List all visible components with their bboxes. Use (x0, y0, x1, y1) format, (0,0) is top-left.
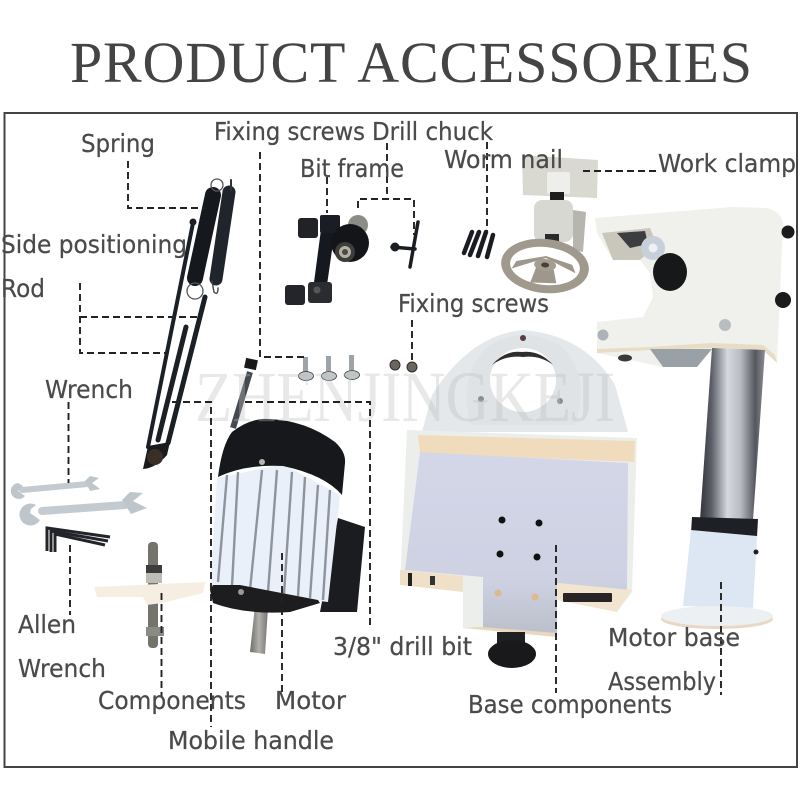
label: drill chuck: Drill chuck (372, 117, 494, 146)
label: motor: Motor (275, 686, 347, 715)
steel column (700, 348, 765, 520)
capacitor box (320, 518, 365, 612)
title: PRODUCT ACCESSORIES (70, 30, 752, 95)
arched motor mount (422, 330, 628, 432)
small fixing screws (298, 355, 417, 380)
base components (400, 330, 637, 668)
chuck key (391, 222, 418, 267)
end plate (210, 585, 320, 613)
spring and side positioning rods (143, 179, 231, 469)
label: worm nail: Worm nail (444, 145, 563, 174)
sleeve (683, 530, 757, 608)
label: allen: Allen (18, 610, 76, 639)
label: fixing screws lower: Fixing screws (398, 289, 549, 318)
finned body (210, 464, 340, 602)
watermark: ZHENJINGKEJI (195, 357, 615, 437)
shaft (250, 606, 268, 654)
hand wheel (498, 235, 592, 297)
label: drill bit: 3/8" drill bit (333, 632, 472, 661)
label: mobile handle: Mobile handle (168, 726, 334, 755)
black collar (691, 517, 758, 537)
head casting (595, 207, 783, 367)
rod foot (143, 442, 170, 469)
label: spring: Spring (81, 129, 155, 158)
threaded components (94, 542, 205, 648)
flange (661, 609, 773, 629)
leader lines (68, 142, 721, 727)
bit frame and drill chuck (285, 215, 369, 305)
label: base components: Base components (468, 690, 672, 719)
holes (496, 516, 542, 560)
label: fixing screws: Fixing screws (214, 117, 365, 146)
label: bit frame: Bit frame (300, 154, 404, 183)
label: work clamp: Work clamp (658, 149, 796, 178)
label: assembly: Assembly (608, 667, 716, 696)
motor (210, 419, 365, 654)
label: side positioning: Side positioning (1, 230, 187, 259)
label: wrench: Wrench (45, 375, 133, 404)
label: allen wrench second line: Wrench (18, 654, 106, 683)
motor base assembly column (595, 207, 794, 629)
long rods (148, 218, 205, 447)
grey plate (405, 452, 628, 635)
label: rod: Rod (1, 274, 45, 303)
label: motor base: Motor base (608, 623, 740, 652)
wrenches (11, 476, 147, 526)
allen keys (47, 528, 110, 552)
worm nails (464, 232, 493, 257)
mobile handle top (233, 358, 258, 428)
work clamp with hand wheel (498, 155, 598, 297)
springs (187, 179, 231, 299)
knob (497, 632, 525, 648)
cap (218, 419, 345, 495)
label: components: Components (98, 686, 246, 715)
base body (400, 430, 637, 637)
